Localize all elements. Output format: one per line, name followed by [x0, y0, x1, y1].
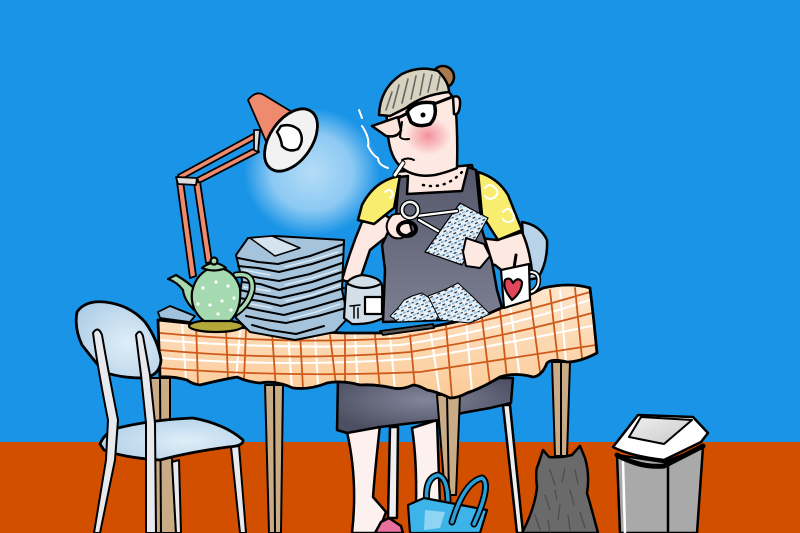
right sleeve — [478, 172, 522, 240]
necklace — [423, 172, 462, 186]
woman's upper body — [342, 165, 532, 322]
chair backrest — [76, 302, 161, 378]
bin lid — [617, 446, 703, 466]
tablecloth — [158, 285, 597, 398]
pen — [380, 324, 434, 335]
left chair — [76, 302, 246, 533]
glasses — [372, 97, 452, 136]
teapot body — [192, 267, 240, 321]
hair — [379, 69, 449, 116]
hair bun — [432, 66, 454, 88]
bulb — [277, 125, 302, 150]
cat — [522, 446, 598, 533]
lamp cap — [248, 93, 292, 146]
teapot — [168, 258, 252, 332]
right arm — [470, 232, 532, 285]
chair seat — [100, 418, 243, 460]
cigarette smoke — [359, 110, 388, 168]
blush — [405, 117, 451, 155]
bin body — [617, 447, 703, 533]
jar — [344, 275, 383, 324]
nose and mouth — [400, 122, 409, 139]
paper scraps pile — [390, 283, 490, 323]
teapot handle — [234, 275, 252, 314]
table legs — [150, 362, 570, 533]
desk lamp — [176, 93, 328, 278]
lamp light glow — [244, 108, 380, 236]
head and face — [386, 80, 457, 176]
woman's legs and shoe — [347, 420, 440, 533]
chair behind woman — [388, 222, 547, 533]
apron — [382, 167, 505, 322]
sleeve pattern — [385, 185, 514, 222]
lamp shade — [254, 99, 328, 181]
neck and chest — [395, 165, 480, 205]
rubbish bin — [613, 415, 708, 533]
cigarette — [395, 163, 403, 175]
left sleeve — [358, 176, 400, 224]
mug with heart — [501, 255, 539, 308]
scissors and hands — [387, 202, 490, 268]
ear — [453, 96, 460, 114]
shoe — [375, 518, 403, 533]
woman's head — [372, 66, 462, 186]
lamp joints — [176, 177, 197, 185]
stack of papers — [158, 236, 348, 340]
teapot spout — [168, 275, 196, 310]
lamp arms — [177, 133, 259, 278]
chair front supports — [93, 329, 118, 533]
left arm — [342, 215, 400, 285]
paper being cut — [425, 203, 488, 265]
shopping bag — [408, 475, 487, 533]
chair back legs — [172, 460, 181, 533]
teapot base — [189, 320, 243, 332]
woman's skirt — [337, 378, 513, 433]
checked pattern — [160, 288, 596, 398]
